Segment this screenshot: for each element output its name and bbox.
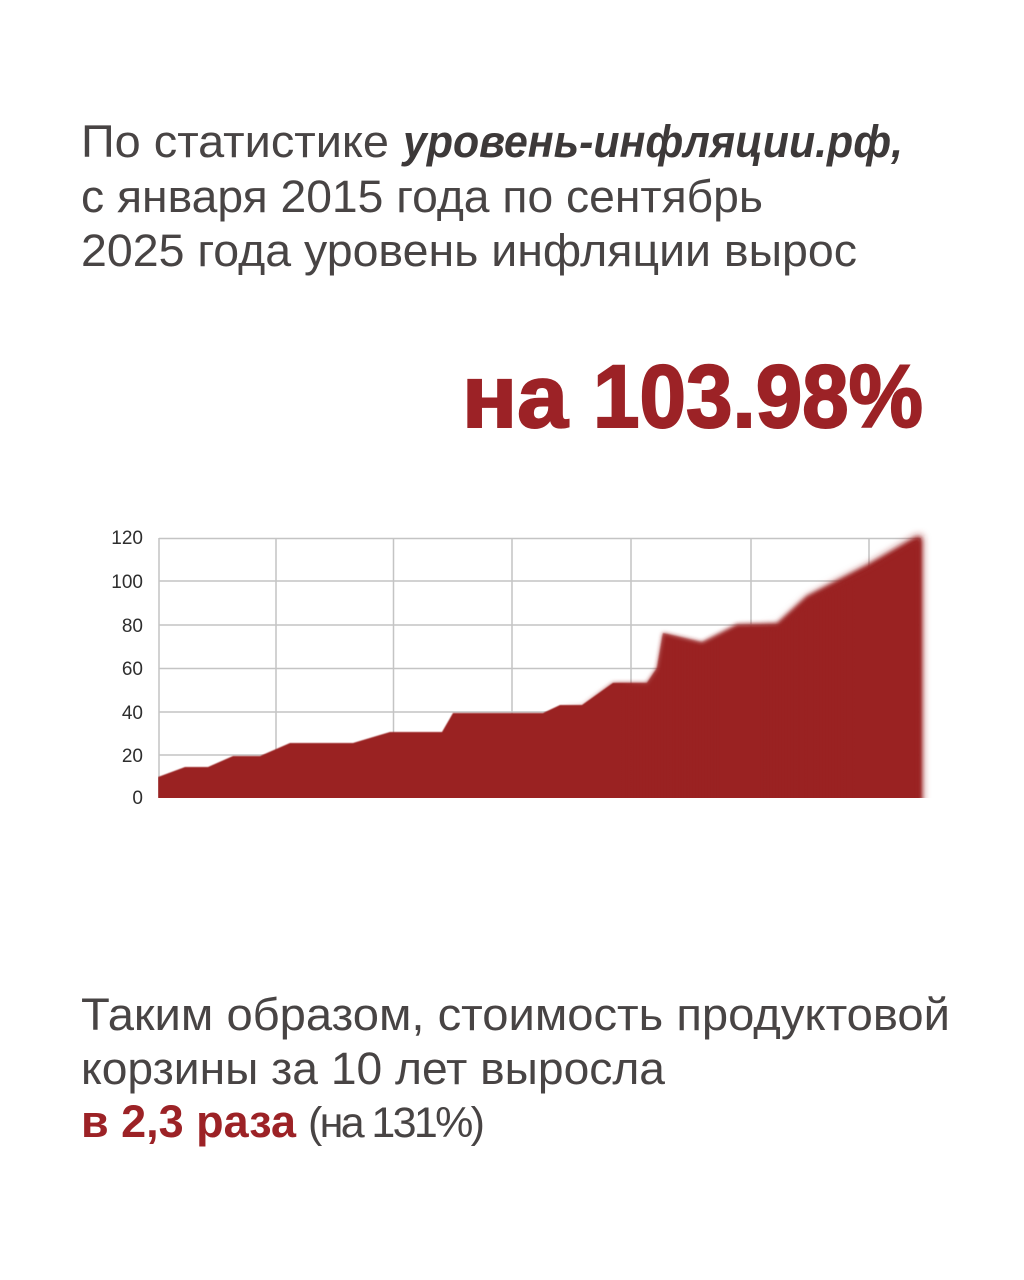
headline figure: на [462, 346, 570, 446]
conclusion text: корзины за 10 лет выросла [81, 1043, 666, 1094]
headline figure: 103.98% [593, 346, 923, 446]
y axis labels: 0 [132, 788, 143, 809]
conclusion text: (на 131%) [308, 1099, 485, 1147]
intro text: уровень-инфляции.рф, [401, 116, 903, 167]
area chart [111, 528, 922, 830]
inflation area [158, 536, 922, 830]
y axis labels: 20 [122, 746, 143, 767]
y axis labels [111, 528, 143, 809]
y axis labels: 80 [122, 616, 143, 637]
y axis labels: 120 [111, 528, 143, 549]
intro text [81, 116, 903, 276]
intro text: 2025 года уровень инфляции вырос [81, 225, 857, 276]
conclusion text: Таким образом, стоимость продуктовой [81, 989, 950, 1040]
y axis labels: 100 [111, 572, 143, 593]
y axis labels: 60 [122, 659, 143, 680]
conclusion text: в 2,3 раза [81, 1096, 297, 1147]
headline figure [462, 346, 923, 446]
intro text: По статистике [81, 116, 389, 167]
conclusion text [81, 989, 950, 1147]
y axis labels: 40 [122, 703, 143, 724]
intro text: с января 2015 года по сентябрь [81, 171, 763, 222]
